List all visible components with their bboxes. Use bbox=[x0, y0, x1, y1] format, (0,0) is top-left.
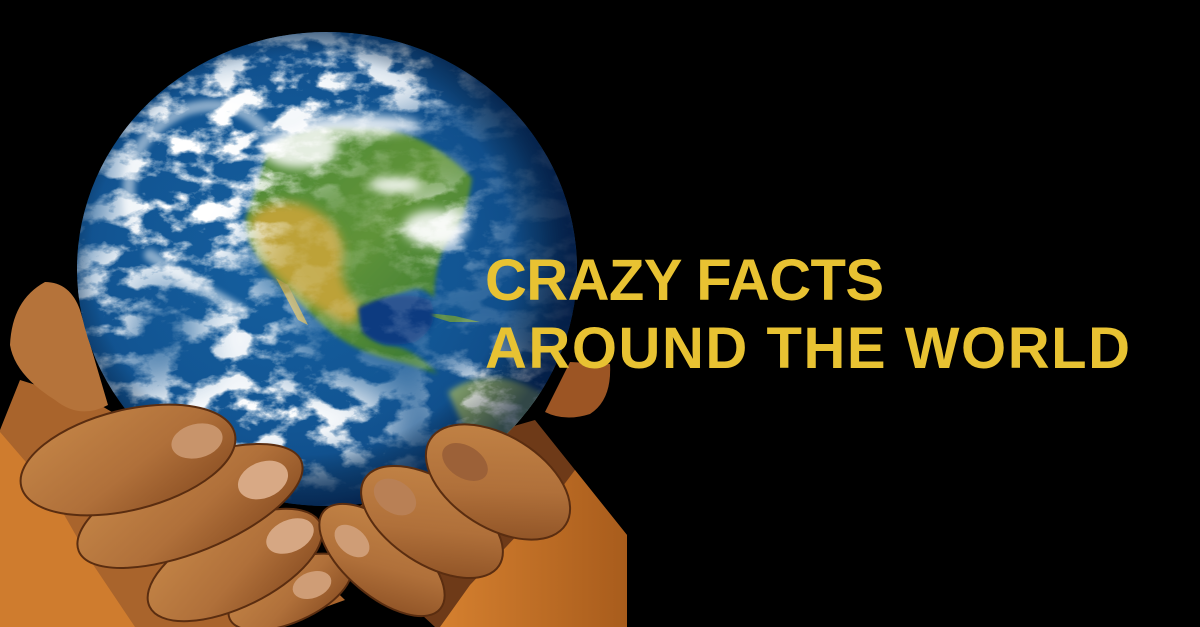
right palm and forearm bbox=[330, 420, 627, 627]
soft clouds over land bbox=[262, 115, 467, 246]
cloud texture bbox=[77, 32, 577, 506]
ocean bbox=[70, 25, 585, 515]
right ring fingernail bbox=[367, 471, 423, 523]
index fingernail bbox=[168, 418, 226, 464]
left thumb bbox=[10, 282, 108, 411]
Gulf of Mexico bbox=[358, 296, 434, 344]
globe edge shading bbox=[77, 32, 577, 506]
right middle fingernail bbox=[435, 435, 495, 489]
land: South America bbox=[446, 374, 542, 434]
right little finger bbox=[301, 484, 463, 627]
right hand fingers bbox=[301, 401, 590, 627]
cloud swirl bbox=[129, 106, 265, 310]
little finger bbox=[218, 538, 362, 627]
left palm and forearm bbox=[0, 380, 345, 627]
right hand nails bbox=[328, 435, 495, 564]
land: arid yellow west bbox=[250, 202, 362, 325]
right ring finger bbox=[342, 443, 522, 601]
little fingernail bbox=[289, 566, 335, 604]
arms and palms bbox=[0, 380, 627, 627]
land: Baja California bbox=[276, 278, 308, 325]
right little fingernail bbox=[328, 518, 376, 564]
left hand fingers bbox=[9, 385, 362, 627]
right middle finger bbox=[406, 401, 590, 563]
land: Caribbean islands bbox=[431, 314, 480, 322]
index finger bbox=[9, 385, 247, 535]
left hand nails bbox=[168, 418, 335, 604]
title bbox=[485, 248, 1130, 381]
ring finger bbox=[131, 486, 339, 627]
globe bbox=[77, 32, 577, 506]
title line 1: CRAZY FACTS bbox=[485, 248, 884, 313]
land: North America bbox=[246, 127, 472, 374]
middle finger bbox=[62, 418, 318, 594]
ring fingernail bbox=[261, 511, 319, 561]
right thumb behind globe bbox=[545, 362, 610, 418]
title line 2: AROUND THE WORLD bbox=[485, 316, 1130, 381]
middle fingernail bbox=[232, 454, 294, 506]
